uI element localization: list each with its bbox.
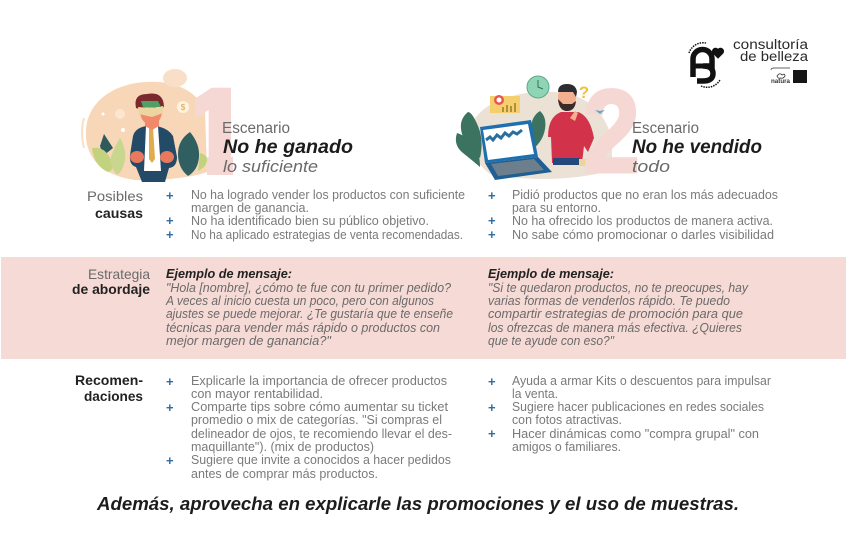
recommendations list: escenario 2 (488, 374, 771, 454)
icon: AB heart monogram (689, 43, 724, 87)
recommendations list: escenario 2: la venta. (512, 387, 558, 401)
row label: estrategia de abordaje (72, 266, 150, 297)
message example: escenario 1: Ejemplo de mensaje: (166, 267, 292, 281)
causes list: escenario 1: No ha logrado vender los productos con suficiente (191, 188, 465, 202)
message example: escenario 2: varias formas de venderlos rápido. Te puedo (488, 294, 730, 308)
recommendations list: escenario 1: promedio o mix de categorías. "Si compras el (191, 413, 442, 427)
heading: escenario 1: Escenario (222, 120, 290, 137)
heading: escenario 2 (632, 120, 762, 176)
message example: escenario 2 (488, 267, 749, 348)
illustration: blindfolded man and right plant (130, 94, 207, 182)
causes list: escenario 1: + (166, 227, 174, 242)
recommendations list: escenario 1: con mayor rentabilidad. (191, 387, 323, 401)
recommendations list: escenario 2: con fotos atractivas. (512, 413, 622, 427)
message example: escenario 2: los ofrezcas de manera más efectiva. ¿Quieres (488, 321, 743, 335)
recommendations list: escenario 1: + (166, 453, 174, 468)
row label: estrategia de abordaje: Estrategia (88, 266, 150, 282)
causes list: escenario 2 (488, 188, 778, 242)
message example: escenario 1: A veces al inicio cuesta un poco, pero con algunos (165, 294, 435, 308)
right plants (178, 132, 199, 176)
recommendations list: escenario 2: Hacer dinámicas como "compra grupal" con (512, 427, 759, 441)
thinking man (548, 83, 594, 166)
illustration: man thinking with laptop (456, 76, 612, 180)
peach blob (86, 82, 207, 180)
causes list: escenario 1: No ha identificado bien su público objetivo. (191, 214, 429, 228)
causes list: escenario 2: No sabe cómo promocionar o darles visibilidad (512, 228, 774, 242)
row label: posibles causas (87, 188, 143, 221)
message example: escenario 1: técnicas para vender más rápido o productos con (166, 321, 440, 335)
laptop (480, 120, 552, 180)
recommendations list: escenario 2: Sugiere hacer publicaciones en redes sociales (512, 400, 764, 414)
heading: escenario 2: Escenario (632, 120, 699, 137)
band: estrategia de abordaje (1, 257, 846, 359)
recommendations list: escenario 1: Comparte tips sobre cómo aumentar su ticket (191, 400, 448, 414)
row label: recomendaciones: Recomen- (75, 373, 143, 388)
causes list: escenario 2: Pidió productos que no eran los más adecuados (512, 188, 778, 202)
message example: escenario 2: compartir estrategias de promoción para que (488, 307, 743, 321)
black square mark (793, 70, 807, 83)
left plants (100, 134, 113, 156)
causes list: escenario 2: + (488, 213, 496, 228)
recommendations list: escenario 1: + (166, 400, 174, 415)
causes list: escenario 2: No ha ofrecido los productos de manera activa. (512, 214, 773, 228)
clock (527, 76, 549, 98)
heading: escenario 1 (222, 120, 353, 176)
row label: estrategia de abordaje: de abordaje (72, 282, 150, 297)
coin (177, 101, 189, 113)
logo: consultoria de belleza (689, 37, 809, 87)
illustration: man blindfolded with money (82, 69, 207, 180)
target chart card (490, 95, 520, 113)
message example: escenario 1: "Hola [nombre], ¿cómo te fue con tu primer pedido? (166, 281, 451, 295)
causes list: escenario 1: margen de ganancia. (191, 201, 309, 215)
natura mark: natura (771, 79, 791, 85)
message example: escenario 2: que te ayude con eso?" (488, 334, 614, 348)
recommendations list: escenario 2: amigos o familiares. (512, 440, 621, 454)
recommendations list: escenario 1 (166, 374, 452, 481)
recommendations list: escenario 1: maquillante"). (mix de productos) (191, 440, 374, 454)
icon: small chevron on numeral (595, 110, 605, 114)
row label: posibles causas: Posibles (87, 188, 143, 204)
heading: escenario 2: No he vendido (632, 137, 762, 158)
causes list: escenario 2: + (488, 188, 496, 203)
row label: posibles causas: causas (95, 206, 143, 221)
recommendations list: escenario 1: delineador de ojos, te recomiendo llevar el des- (191, 427, 452, 441)
closing statement: Además, aprovecha en explicarle las promociones y el uso de muestras. (96, 494, 739, 514)
recommendations list: escenario 2: + (488, 400, 496, 415)
causes list: escenario 1: No ha aplicado estrategias de venta recomendadas. (191, 228, 463, 242)
heading: escenario 1: No he ganado (223, 137, 353, 158)
recommendations list: escenario 1: antes de comprar más productos. (191, 467, 378, 481)
numeral 1: 1 (184, 66, 250, 198)
causes list: escenario 1: + (166, 213, 174, 228)
message example: escenario 1: ajustes se puede mejorar. ¿Te gustaría que te enseñe (166, 307, 453, 321)
recommendations list: escenario 1: Sugiere que invite a conocidos a hacer pedidos (191, 453, 451, 467)
causes list: escenario 1: + (166, 188, 174, 203)
row label: recomendaciones: daciones (84, 389, 143, 404)
illustration: man blindfolded with money: $ (181, 103, 186, 112)
message example: escenario 1: mejor margen de ganancia?" (166, 334, 332, 348)
message example: escenario 2: "Si te quedaron productos, no te preocupes, hay (488, 281, 749, 295)
question mark: ? (579, 83, 589, 102)
row label: recomendaciones (75, 373, 143, 404)
heading: escenario 1: lo suficiente (223, 157, 318, 176)
logo wordmark: consultoría (733, 37, 809, 52)
recommendations list: escenario 2: + (488, 374, 496, 389)
beige blob (469, 92, 612, 179)
recommendations list: escenario 1: + (166, 374, 174, 389)
causes list: escenario 2: para su entorno. (512, 201, 601, 215)
causes list: escenario 2: + (488, 227, 496, 242)
message example: escenario 1 (165, 267, 453, 348)
message example: escenario 2: Ejemplo de mensaje: (488, 267, 614, 281)
logo: consultoria de belleza: de belleza (740, 49, 809, 64)
numeral 2: 2 (583, 66, 640, 198)
causes list: escenario 1 (166, 188, 465, 242)
recommendations list: escenario 2: Ayuda a armar Kits o descuentos para impulsar (512, 374, 771, 388)
recommendations list: escenario 1: Explicarle la importancia de ofrecer productos (191, 374, 447, 388)
recommendations list: escenario 2: + (488, 426, 496, 441)
leaves (461, 112, 482, 158)
man (130, 94, 177, 182)
heading: escenario 2: todo (632, 157, 670, 176)
